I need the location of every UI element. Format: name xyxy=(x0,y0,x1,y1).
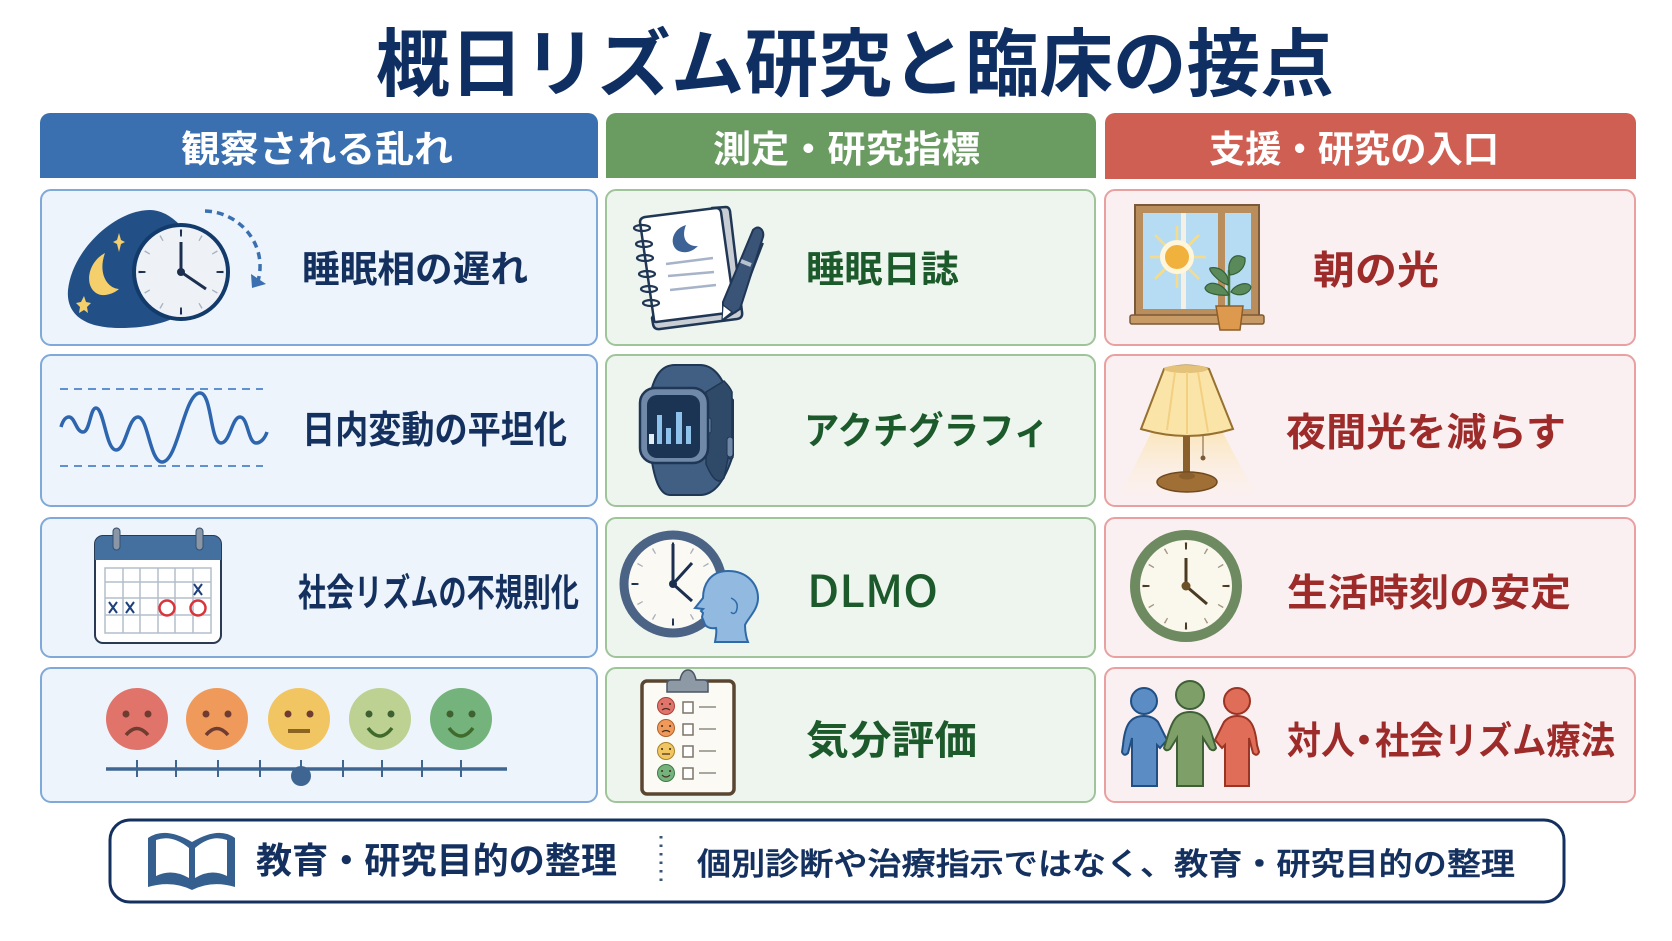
icon: clock and head xyxy=(624,535,758,642)
panel: blue row 4 mood scale xyxy=(41,668,597,802)
label: 睡眠日誌 xyxy=(806,249,959,290)
label: DLMO xyxy=(807,556,938,620)
title: 概日リズム研究と臨床の接点 xyxy=(376,23,1334,106)
icon: open book xyxy=(148,833,235,890)
label: 社会リズムの不規則化 xyxy=(298,572,579,615)
panel header: support entry xyxy=(1105,113,1636,179)
panel header: measurement indices: 測定・研究指標 xyxy=(713,129,980,170)
panel: blue row 1 sleep phase delay xyxy=(41,190,597,345)
icon: calendar xyxy=(95,528,221,643)
icon: table lamp xyxy=(1121,365,1255,493)
icon: night blob and clock xyxy=(68,210,266,328)
label: 対人 xyxy=(1287,721,1355,763)
icon: smartwatch xyxy=(640,365,733,495)
panel header: observed disturbances xyxy=(40,113,598,178)
icon: window with sun and plant xyxy=(1130,205,1264,330)
icon: clipboard xyxy=(642,670,734,794)
label: ・ xyxy=(1345,721,1383,763)
panel: red row 3 stable daily time xyxy=(1105,518,1635,657)
panel: blue row 2 flattened variation xyxy=(41,355,597,506)
footer note: 個別診断や治療指示ではなく、教育・研究目的の整理 xyxy=(697,847,1515,882)
panel: green row 1 sleep diary xyxy=(606,190,1095,345)
panel: blue row 3 irregular social rhythm xyxy=(41,518,597,657)
footer callout xyxy=(110,820,1564,902)
panel header: measurement indices xyxy=(606,113,1096,178)
icon: notebook and pen xyxy=(634,207,763,329)
label: 睡眠相の遅れ xyxy=(302,249,528,290)
footer heading: 教育・研究目的の整理 xyxy=(256,840,617,881)
panel header: support entry: 支援・研究の入口 xyxy=(1209,129,1499,170)
label: 社会リズム療法 xyxy=(1375,720,1615,763)
label: 気分評価 xyxy=(806,719,977,763)
label: 朝の光 xyxy=(1313,250,1439,293)
panel: green row 2 actigraphy xyxy=(606,355,1095,506)
icon: green clock xyxy=(1135,535,1237,637)
panel: green row 4 mood rating xyxy=(606,668,1095,802)
label xyxy=(1287,720,1615,763)
icon: three people xyxy=(1122,681,1259,786)
panel header: observed disturbances: 観察される乱れ xyxy=(181,129,453,170)
icon: flattening wave xyxy=(60,389,267,466)
panel: red row 1 morning light xyxy=(1105,190,1635,345)
panel: red row 4 IPSRT xyxy=(1105,668,1635,802)
label: 夜間光を減らす xyxy=(1286,412,1566,455)
label: 生活時刻の安定 xyxy=(1287,573,1571,615)
label: 日内変動の平坦化 xyxy=(302,410,567,452)
icon: mood faces and slider xyxy=(106,688,507,786)
label: アクチグラフィ xyxy=(804,411,1049,453)
panel: red row 2 reduce night light xyxy=(1105,355,1635,506)
panel: green row 3 DLMO xyxy=(606,518,1095,657)
